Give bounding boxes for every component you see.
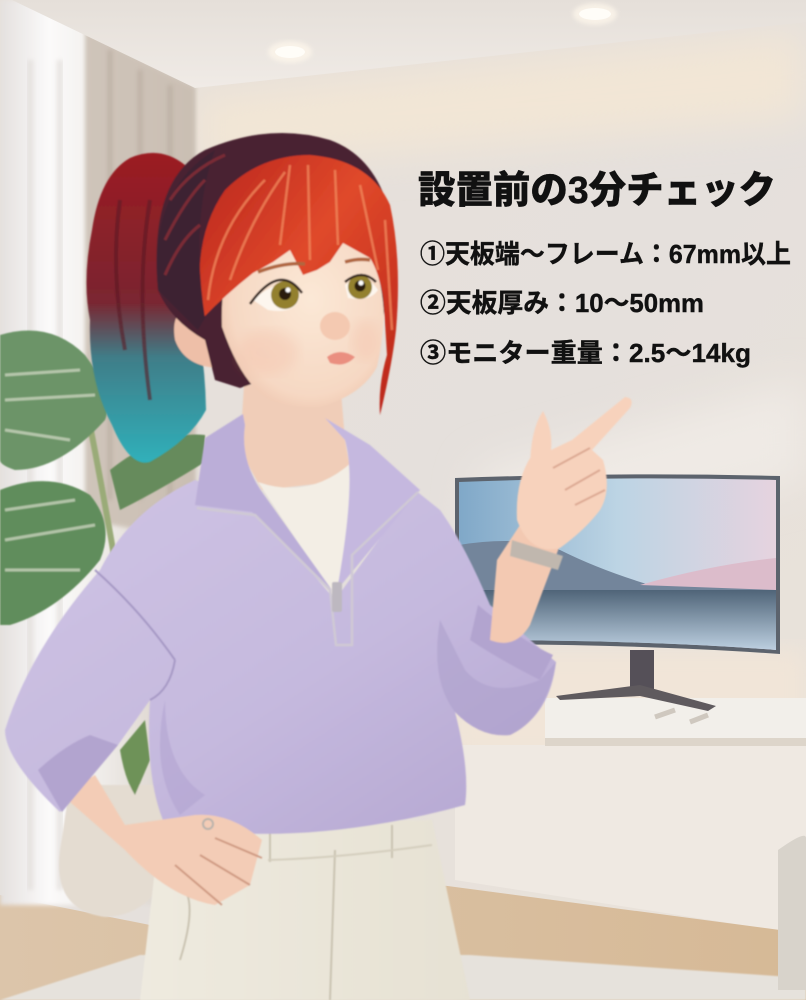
neck and inner shirt [240,380,352,490]
item 1: ①天板端〜フレーム：67mm以上 [420,239,791,269]
title: 設置前の3分チェック [418,170,776,212]
collar [195,414,332,590]
nose and mouth [320,312,350,340]
face [222,210,384,407]
floor [0,885,806,1000]
item 2: ②天板厚み：10〜50mm [420,288,704,318]
curtains [0,0,195,905]
desk and monitor [455,474,806,990]
character [5,133,632,1000]
pointing hand [517,397,632,549]
left hand on hip [62,775,262,905]
pants [140,820,470,1000]
left cuff [38,735,118,812]
zipper [197,492,418,645]
back hair [157,133,395,388]
sweatshirt body [5,480,556,834]
ear [174,306,225,368]
watch [510,540,563,570]
ceiling with lights [12,0,806,88]
plant [0,330,205,917]
eyes [253,285,300,311]
right sleeve cuff [470,605,553,680]
checklist [420,239,791,368]
item 3: ③モニター重量：2.5〜14kg [420,338,751,368]
fringe [199,155,398,415]
forearm [490,525,560,643]
ponytail [86,153,206,463]
